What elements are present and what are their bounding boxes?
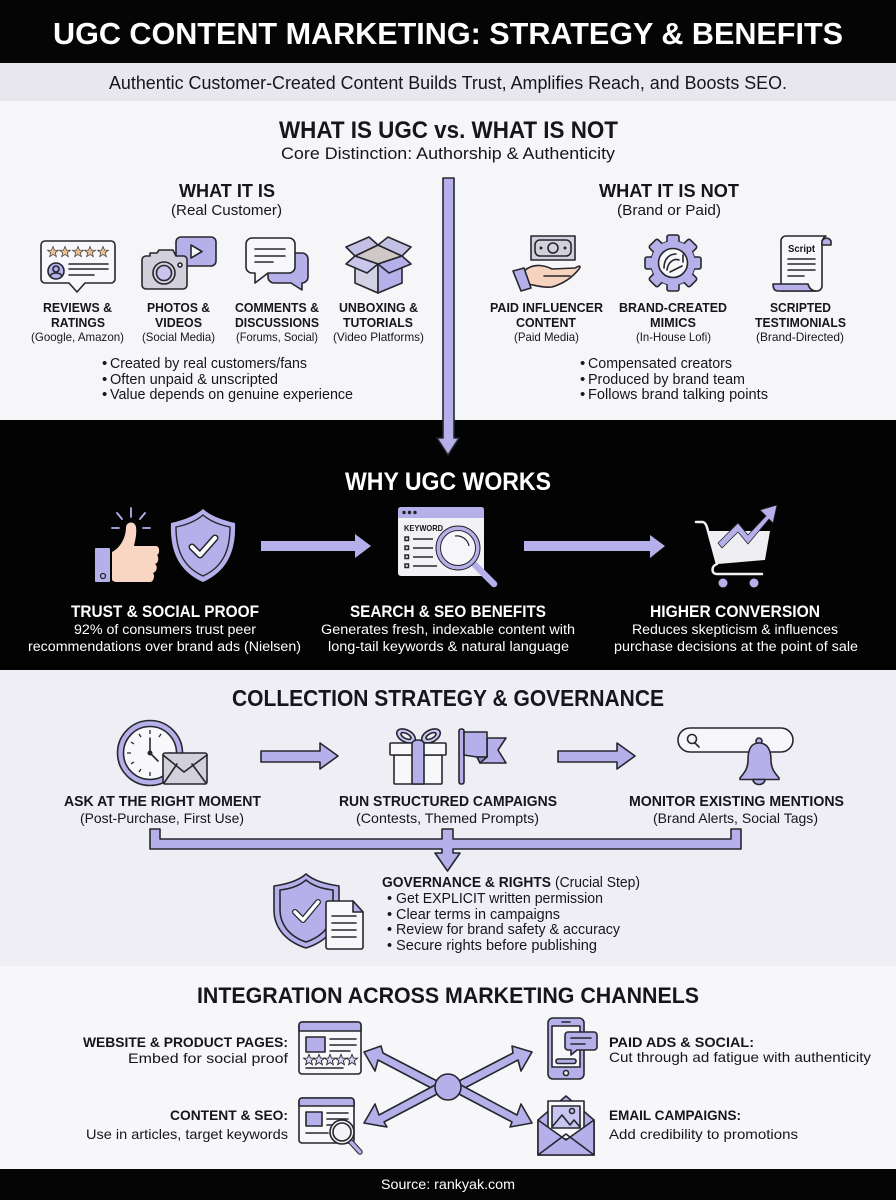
text: governance and rights: Secure rights before publishing [396,938,597,954]
item labels: what it is not: (In-House Lofi) [636,330,711,344]
icon: trust shield [171,509,235,582]
text: governance and rights: • [387,938,392,954]
item labels: what it is: VIDEOS [155,315,202,330]
icon: clock and envelope [118,720,207,786]
arrow: search to conversion [524,535,665,558]
text: ask at the right moment [64,793,261,826]
icon: cart with trend arrow [696,505,777,588]
arrow: moment to campaigns [261,743,338,769]
script label: Script [788,244,816,255]
icon: camera and video [142,237,216,289]
item labels: what it is: RATINGS [51,315,105,330]
text: higher conversion: HIGHER CONVERSION [650,603,820,621]
footer: source: Source: rankyak.com [381,1176,515,1192]
item labels: what it is: (Video Platforms) [333,330,424,344]
column: what it is not [490,181,846,403]
item labels: what it is not [490,300,846,344]
heading: what is UGC: WHAT IS UGC vs. WHAT IS NOT [279,117,618,144]
text: governance and rights: GOVERNANCE & RIGHTS [382,875,551,891]
heading: integration: INTEGRATION ACROSS MARKETING CHANNELS [197,983,699,1008]
item labels: what it is not: CONTENT [516,315,576,330]
item labels: what it is: (Google, Amazon) [31,330,124,344]
item labels: what it is: DISCUSSIONS [235,315,319,330]
text: paid ads and social [609,1034,871,1065]
item labels: what it is not: (Paid Media) [514,330,579,344]
bullet list: what it is: Created by real customers/fans [110,355,307,372]
icon: gear with mimic [645,235,701,291]
text: governance and rights: • [387,891,392,907]
text: content and SEO [86,1107,288,1142]
item labels: what it is: REVIEWS & [43,300,112,315]
icon: product page window [299,1022,361,1074]
subheading: real customer: (Real Customer) [171,202,282,219]
text: governance and rights: Get EXPLICIT written permission [396,891,603,907]
text: run structured campaigns [339,793,557,826]
icon: open box [346,237,411,293]
text: paid ads and social: Cut through ad fatigue with authenticity [609,1049,871,1065]
item labels: what it is: TUTORIALS [343,315,413,330]
icon: email with image [538,1096,594,1155]
icon: paid hand with cash [513,236,580,291]
text: trust and social proof: recommendations over brand ads (Nielsen) [28,639,301,654]
text: run structured campaigns: RUN STRUCTURED CAMPAIGNS [339,793,557,810]
text: ask at the right moment: (Post-Purchase, First Use) [80,810,244,826]
footer: source [0,1169,896,1200]
subheading: brand or paid: (Brand or Paid) [617,202,721,219]
heading: what it is not: WHAT IT IS NOT [599,181,739,201]
text: content and SEO: Use in articles, target keywords [86,1126,288,1142]
bullet list: what it is not [580,355,768,403]
arrow: campaigns to monitoring [558,743,635,769]
panel: collection strategy and governance [0,670,896,966]
keyword label: KEYWORD [404,523,443,533]
bullet list: what it is: • [102,386,107,403]
text: search and SEO benefits: Generates fresh, indexable content with [321,622,575,637]
text: paid ads and social: PAID ADS & SOCIAL: [609,1034,754,1050]
icon: governance shield and document [274,874,363,949]
text: trust and social proof: 92% of consumers trust peer [74,622,257,637]
title banner: UGC CONTENT MARKETING: STRATEGY & BENEFITS [53,16,843,51]
bullet list: what it is not: • [580,355,585,372]
icon: keyword search window [398,507,494,584]
item labels: what it is: (Forums, Social) [236,330,318,344]
heading: what it is: WHAT IT IS [179,181,275,201]
text: search and SEO benefits: SEARCH & SEO BENEFITS [350,603,546,621]
icon: phone with message [548,1018,597,1079]
text: website and product pages: WEBSITE & PRODUCT PAGES: [83,1034,288,1050]
icon: gift box [390,726,446,784]
column: what it is [31,181,424,403]
item labels: what it is: UNBOXING & [339,300,418,315]
item labels: what it is: PHOTOS & [147,300,210,315]
text: search and SEO benefits: long-tail keywords & natural language [328,639,569,654]
arrow: bracket to governance [150,829,741,871]
text: email campaigns: Add credibility to promotions [609,1126,798,1142]
bullet list: what it is: • [102,355,107,372]
subtitle band: Authentic Customer-Created Content Builds Trust, Amplifies Reach, and Boosts SEO. [109,73,787,93]
subheading: core distinction: Core Distinction: Authorship & Authenticity [281,145,616,163]
bullet list: what it is: Value depends on genuine experience [110,386,353,403]
panel: why UGC works [0,420,896,670]
panel: what is UGC vs what is not [0,101,896,420]
bullet list: what it is: Often unpaid & unscripted [110,371,278,388]
icon: search bar and bell [678,728,793,785]
text: website and product pages: Embed for social proof [128,1050,288,1066]
text: governance and rights: • [387,907,392,923]
icon: flag [459,729,506,784]
heading: collection strategy: COLLECTION STRATEGY & GOVERNANCE [232,685,664,711]
text: higher conversion: Reduces skepticism & influences [632,622,838,637]
text: trust and social proof [28,603,301,654]
item labels: what it is not: TESTIMONIALS [755,315,846,330]
text: email campaigns: EMAIL CAMPAIGNS: [609,1107,741,1123]
text: governance and rights: • [387,922,392,938]
item labels: what it is [31,300,424,344]
arrow: trust to search [261,534,371,558]
title banner [0,0,896,63]
text: content and SEO: CONTENT & SEO: [170,1107,288,1123]
bullet list: what it is not: Follows brand talking points [588,386,768,403]
icon: chat bubbles [246,238,308,290]
bullet list: what it is not: • [580,386,585,403]
text: higher conversion [614,603,858,654]
bullet list: what it is not: • [580,371,585,388]
bullet list: what it is not: Produced by brand team [588,371,745,388]
subtitle band [0,63,896,101]
text: website and product pages [83,1034,288,1066]
item labels: what it is not: PAID INFLUENCER [490,300,604,315]
icon: content window with magnifier [299,1098,360,1152]
text: governance and rights: (Crucial Step) [555,875,640,891]
text: email campaigns [609,1107,798,1142]
bullet list: what it is not: Compensated creators [588,355,732,372]
item labels: what it is not: BRAND-CREATED [619,300,727,315]
arrow: main vertical [437,178,459,455]
icon: reviews card [41,241,115,292]
arrows: hub to channels [364,1046,532,1127]
text: ask at the right moment: ASK AT THE RIGHT MOMENT [64,793,261,810]
item labels: what it is not: MIMICS [650,315,696,330]
text: trust and social proof: TRUST & SOCIAL PROOF [71,603,259,621]
bullet list: what it is [102,355,353,403]
item labels: what it is not: SCRIPTED [770,300,831,315]
text: governance and rights: Review for brand safety & accuracy [396,922,621,938]
text: search and SEO benefits [321,603,575,654]
text: run structured campaigns: (Contests, Themed Prompts) [356,810,539,826]
panel: integration across marketing channels [0,966,896,1169]
heading: why UGC works: WHY UGC WORKS [345,468,551,496]
item labels: what it is: COMMENTS & [235,300,319,315]
item labels: what it is: (Social Media) [142,330,215,344]
text: monitor existing mentions [629,793,844,826]
text: monitor existing mentions: MONITOR EXISTING MENTIONS [629,793,844,810]
item labels: what it is not: (Brand-Directed) [756,330,844,344]
icon: script scroll [773,236,831,291]
text: higher conversion: purchase decisions at the point of sale [614,639,858,654]
bullet list: what it is: • [102,371,107,388]
text: governance and rights [382,875,640,954]
icon: thumbs up [95,508,159,582]
text: monitor existing mentions: (Brand Alerts, Social Tags) [653,810,818,826]
text: governance and rights: Clear terms in campaigns [396,907,560,923]
